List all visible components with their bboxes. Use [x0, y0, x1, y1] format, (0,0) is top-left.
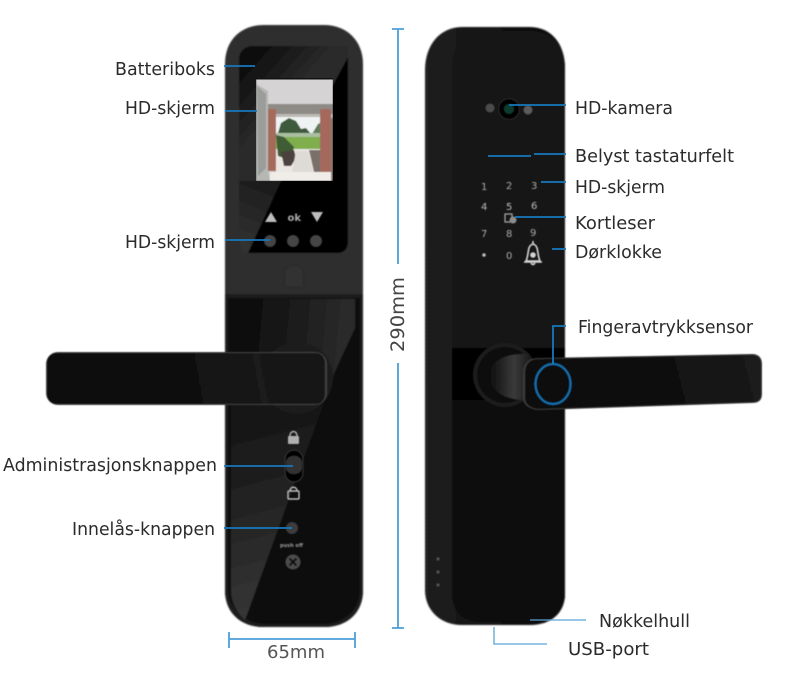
label: HD-skjerm keypad: HD-skjerm — [575, 178, 665, 198]
keypad: 6 — [531, 201, 537, 212]
keypad: 3 — [531, 181, 537, 192]
label: Dørklokke: Dørklokke — [575, 243, 662, 263]
rear controls: push off — [280, 543, 304, 549]
label: Innelås-knappen: Innelås-knappen — [72, 519, 215, 540]
icon: doorbell — [524, 241, 542, 264]
left lock: front panel — [46, 25, 363, 627]
rear controls — [280, 432, 304, 570]
rear handle — [46, 342, 333, 414]
camera — [486, 98, 532, 120]
callout lines: left lock — [224, 66, 293, 528]
label: Nøkkelhull: Nøkkelhull — [599, 612, 690, 632]
screen control icons — [264, 212, 323, 287]
screen control icons: ok — [288, 213, 301, 224]
keypad: 2 — [506, 181, 512, 192]
camera preview photo — [256, 78, 333, 181]
label: Batteriboks: Batteriboks — [115, 60, 215, 80]
dimension: width 65mm — [229, 632, 355, 663]
keypad: 5 — [506, 202, 512, 213]
front handle with fingerprint sensor — [473, 343, 762, 410]
right lock: front panel — [425, 27, 762, 625]
callout lines: right lock — [488, 105, 566, 364]
keypad: 4 — [481, 202, 487, 213]
dimension: height 290mm: 290mm — [387, 277, 409, 352]
label: Administrasjonsknappen: Administrasjonsknappen — [3, 456, 217, 476]
label: HD-skjerm buttons: HD-skjerm — [125, 233, 215, 253]
label: Belyst tastaturfelt: Belyst tastaturfelt — [575, 147, 734, 167]
keypad: 8 — [506, 229, 512, 240]
label: Fingeravtrykksensor: Fingeravtrykksensor — [578, 318, 754, 338]
label: USB-port: USB-port — [568, 640, 649, 660]
dimension: height 290mm — [387, 29, 409, 628]
label: Kortleser: Kortleser — [575, 214, 656, 234]
label: HD-kamera: HD-kamera — [575, 99, 673, 119]
keypad: 1 — [481, 182, 487, 193]
keypad: 9 — [530, 228, 536, 239]
dimension: width 65mm: 65mm — [267, 642, 325, 663]
keypad: 7 — [481, 229, 487, 240]
callout lines: bottom ports — [494, 620, 586, 644]
keypad — [481, 181, 537, 262]
label: HD-skjerm top: HD-skjerm — [125, 99, 215, 119]
keypad: 0 — [506, 251, 512, 262]
